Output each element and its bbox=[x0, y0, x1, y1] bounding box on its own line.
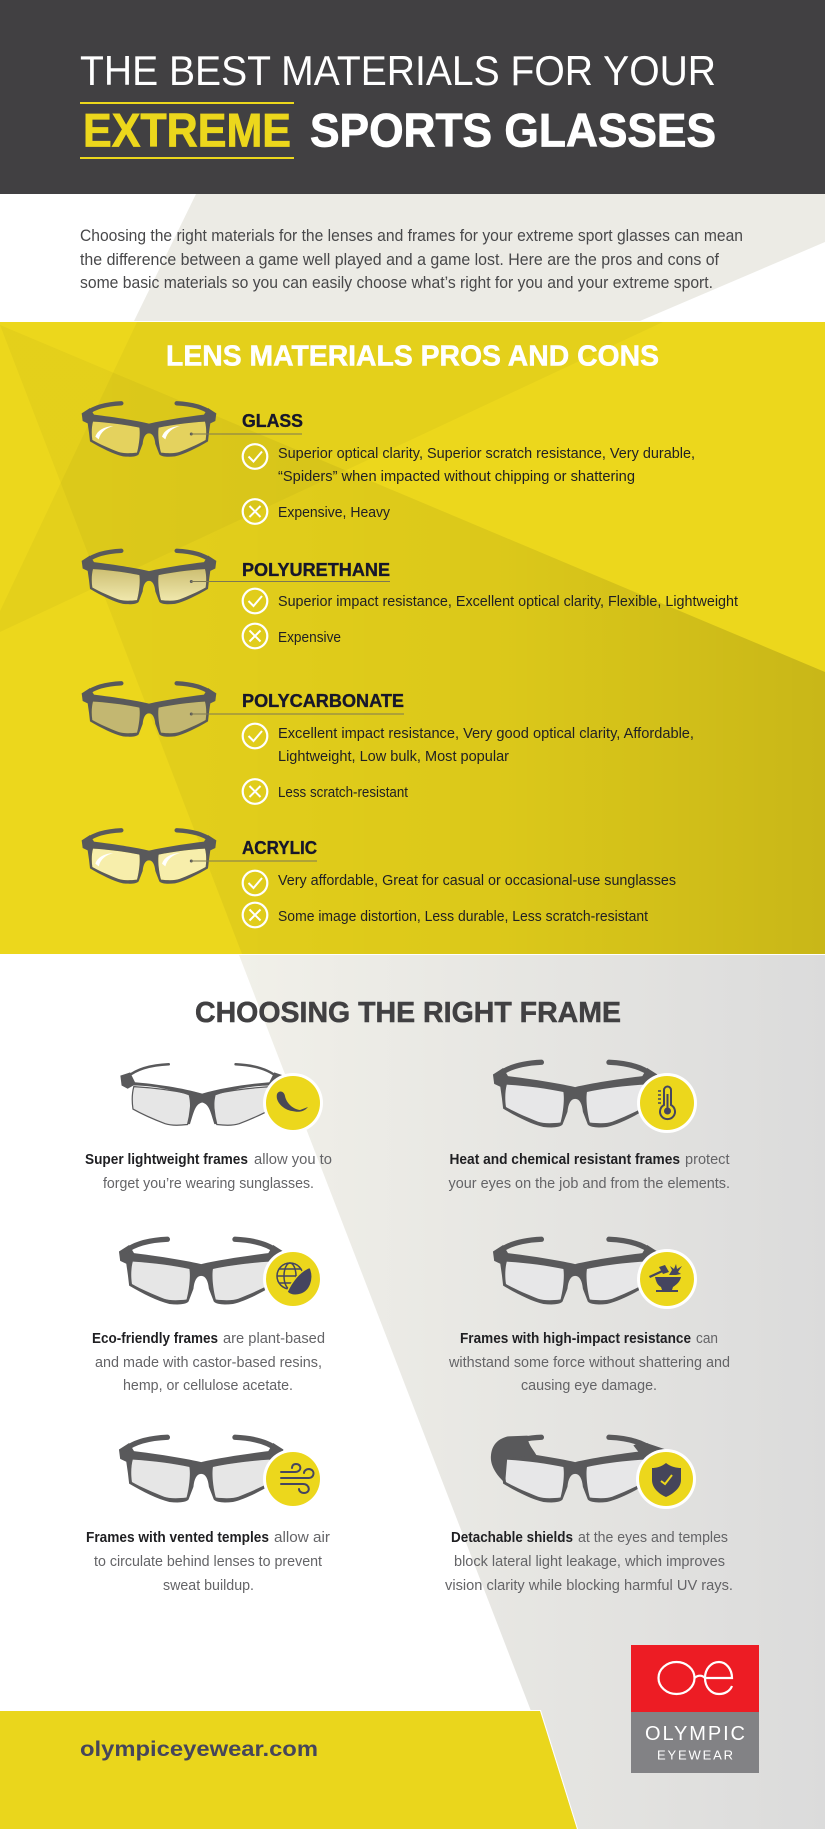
pros icon bbox=[243, 589, 267, 613]
material: acrylic bbox=[82, 830, 676, 927]
item: high-impact resistance bbox=[448, 1239, 730, 1394]
icon: feather bbox=[263, 1073, 323, 1133]
caption: block lateral light leakage, which improves bbox=[454, 1554, 725, 1570]
panel: title header bbox=[0, 0, 825, 194]
caption: Super lightweight frames bbox=[85, 1152, 248, 1168]
logo name: OLYMPIC bbox=[645, 1723, 745, 1745]
icon: hammer and anvil bbox=[637, 1249, 697, 1309]
item: vented temples bbox=[86, 1437, 330, 1594]
item: heat and chemical resistant bbox=[448, 1062, 730, 1192]
glasses: clear lens bbox=[82, 403, 216, 457]
caption: vision clarity while blocking harmful UV rays. bbox=[445, 1578, 733, 1594]
caption bbox=[92, 1331, 325, 1394]
caption: your eyes on the job and from the elements. bbox=[448, 1176, 730, 1192]
panel: introduction bbox=[80, 194, 825, 321]
caption: allow you to bbox=[254, 1152, 332, 1168]
material: glass bbox=[82, 403, 695, 524]
caption: protect bbox=[685, 1152, 730, 1168]
material: polycarbonate bbox=[82, 683, 694, 804]
icon: wind bbox=[263, 1449, 323, 1509]
caption: Eco-friendly frames bbox=[92, 1331, 218, 1347]
icon: globe and leaf bbox=[263, 1249, 323, 1309]
caption bbox=[448, 1331, 730, 1394]
pros text: Excellent impact resistance, Very good optical clarity, Affordable, bbox=[278, 725, 694, 742]
glasses: tinted gradient lens bbox=[82, 551, 216, 604]
caption: causing eye damage. bbox=[521, 1378, 657, 1394]
cons text: Less scratch-resistant bbox=[278, 784, 409, 801]
pros text: Lightweight, Low bulk, Most popular bbox=[278, 748, 509, 765]
glasses: thick frame bbox=[119, 1437, 283, 1502]
glasses: thick frame bbox=[119, 1239, 283, 1304]
caption bbox=[85, 1152, 332, 1192]
panel: choosing the right frame bbox=[85, 955, 825, 1829]
intro text: the difference between a game well played and a game lost. Here are the pros and cons of bbox=[80, 250, 719, 269]
cons icon bbox=[243, 499, 267, 524]
pros text: “Spiders” when impacted without chipping or shattering bbox=[278, 468, 635, 485]
caption: sweat buildup. bbox=[163, 1578, 254, 1594]
heading: POLYURETHANE bbox=[242, 559, 390, 580]
cons text: Some image distortion, Less durable, Less scratch-resistant bbox=[278, 908, 649, 925]
lens heading: LENS MATERIALS PROS AND CONS bbox=[166, 340, 659, 372]
icon: shield with check bbox=[636, 1449, 696, 1509]
title line two: SPORTS GLASSES bbox=[310, 104, 716, 156]
leader line bbox=[191, 713, 404, 715]
caption bbox=[86, 1530, 330, 1594]
caption: hemp, or cellulose acetate. bbox=[123, 1378, 293, 1394]
caption: Frames with vented temples bbox=[86, 1530, 269, 1546]
intro text: Choosing the right materials for the lenses and frames for your extreme sport glasses can mean bbox=[80, 226, 743, 245]
frame heading: CHOOSING THE RIGHT FRAME bbox=[195, 997, 621, 1029]
leader line bbox=[191, 580, 390, 582]
cons icon bbox=[243, 903, 267, 927]
pros text: Superior optical clarity, Superior scratch resistance, Very durable, bbox=[278, 445, 695, 462]
glasses: thick frame bbox=[493, 1062, 657, 1127]
pros text bbox=[278, 445, 695, 485]
caption bbox=[445, 1530, 733, 1594]
item: eco-friendly bbox=[92, 1239, 325, 1394]
heading: GLASS bbox=[242, 410, 303, 431]
cons text: Expensive bbox=[278, 629, 341, 646]
icon: thermometer bbox=[637, 1073, 697, 1133]
caption: Detachable shields bbox=[451, 1530, 573, 1546]
pros text: Superior impact resistance, Excellent optical clarity, Flexible, Lightweight bbox=[278, 593, 739, 610]
cons icon bbox=[243, 624, 267, 648]
website url: olympiceyewear.com bbox=[80, 1738, 318, 1761]
item: detachable shields bbox=[445, 1436, 733, 1594]
logo subname: EYEWEAR bbox=[657, 1748, 733, 1762]
leader line bbox=[191, 433, 302, 435]
glasses: pale lens bbox=[82, 830, 216, 884]
caption: can bbox=[696, 1331, 718, 1347]
caption bbox=[448, 1152, 730, 1192]
logo mark bbox=[658, 1662, 732, 1694]
cons icon bbox=[243, 779, 267, 804]
caption: and made with castor-based resins, bbox=[95, 1355, 322, 1371]
title highlight: extreme: EXTREME bbox=[83, 104, 291, 156]
intro text: some basic materials so you can easily choose what’s right for you and your extreme sport. bbox=[80, 273, 713, 292]
panel: footer bbox=[0, 1710, 578, 1829]
caption: Heat and chemical resistant frames bbox=[450, 1152, 680, 1168]
pros icon bbox=[243, 724, 267, 748]
glasses: thin frame bbox=[120, 1064, 284, 1125]
glasses: thick frame bbox=[493, 1239, 657, 1304]
glasses: dark tinted lens bbox=[82, 683, 216, 737]
pros text: Very affordable, Great for casual or occasional-use sunglasses bbox=[278, 872, 676, 889]
pros icon bbox=[243, 871, 267, 895]
caption: at the eyes and temples bbox=[578, 1530, 728, 1546]
material: polyurethane bbox=[82, 551, 739, 648]
item: super lightweight bbox=[85, 1064, 332, 1192]
title line one: THE BEST MATERIALS FOR YOUR bbox=[80, 47, 716, 94]
caption: to circulate behind lenses to prevent bbox=[94, 1554, 322, 1570]
caption: forget you’re wearing sunglasses. bbox=[103, 1176, 314, 1192]
glasses: frame with side shields bbox=[491, 1436, 666, 1502]
intro text bbox=[80, 226, 743, 292]
heading: ACRYLIC bbox=[242, 837, 317, 858]
pros icon bbox=[243, 444, 267, 469]
logo: Olympic Eyewear bbox=[631, 1645, 759, 1773]
caption: withstand some force without shattering and bbox=[448, 1355, 730, 1371]
caption: Frames with high-impact resistance bbox=[460, 1331, 691, 1347]
caption: are plant-based bbox=[223, 1331, 325, 1347]
leader line bbox=[191, 860, 317, 862]
pros text bbox=[278, 725, 694, 765]
cons text: Expensive, Heavy bbox=[278, 504, 390, 521]
heading: POLYCARBONATE bbox=[242, 690, 404, 711]
panel: lens materials bbox=[0, 322, 825, 954]
caption: allow air bbox=[274, 1530, 330, 1546]
